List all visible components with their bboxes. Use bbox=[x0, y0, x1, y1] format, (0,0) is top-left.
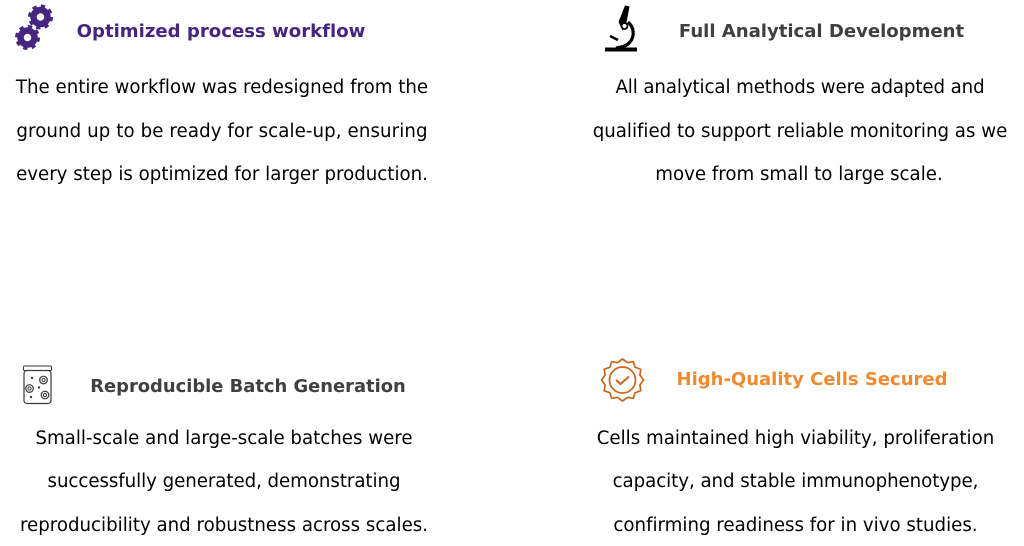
text block: workflow description: ground up to be ready for scale-up, ensuring bbox=[16, 120, 428, 142]
heading: optimized process workflow: Optimized process workflow bbox=[77, 21, 365, 42]
panel: reproducible batch generation bbox=[20, 366, 428, 536]
text block: cells description: Cells maintained high viability, proliferation bbox=[597, 428, 994, 448]
text block: workflow description bbox=[16, 77, 428, 184]
text block: batch description bbox=[20, 428, 428, 536]
text block: analytical description: move from small to large scale. bbox=[655, 164, 943, 184]
text block: cells description: capacity, and stable immunophenotype, bbox=[613, 471, 978, 492]
text block: analytical description bbox=[593, 77, 1007, 184]
text block: batch description: reproducibility and robustness across scales. bbox=[20, 514, 428, 536]
text block: workflow description: every step is optimized for larger production. bbox=[16, 164, 428, 184]
icon: quality badge bbox=[600, 358, 644, 402]
text block: workflow description: The entire workflow was redesigned from the bbox=[16, 77, 428, 98]
heading: reproducible batch generation: Reproducible Batch Generation bbox=[90, 376, 406, 397]
heading: full analytical development: Full Analytical Development bbox=[679, 21, 964, 42]
text block: cells description: confirming readiness for in vivo studies. bbox=[613, 514, 978, 536]
icon: cell culture jar bbox=[23, 366, 52, 404]
icon: microscope bbox=[605, 6, 637, 52]
panel: full analytical development bbox=[593, 6, 1007, 184]
text block: batch description: Small-scale and large-scale batches were bbox=[35, 428, 413, 448]
text block: analytical description: qualified to support reliable monitoring as we bbox=[593, 120, 1007, 142]
text block: analytical description: All analytical methods were adapted and bbox=[615, 77, 985, 98]
text block: batch description: successfully generated, demonstrating bbox=[48, 471, 400, 492]
panel: high-quality cells secured bbox=[597, 358, 994, 536]
icon: purple gears bbox=[15, 4, 53, 50]
text block: cells description bbox=[597, 428, 994, 536]
heading: high-quality cells secured: High-Quality Cells Secured bbox=[677, 369, 947, 390]
panel: optimized process workflow bbox=[15, 4, 428, 184]
